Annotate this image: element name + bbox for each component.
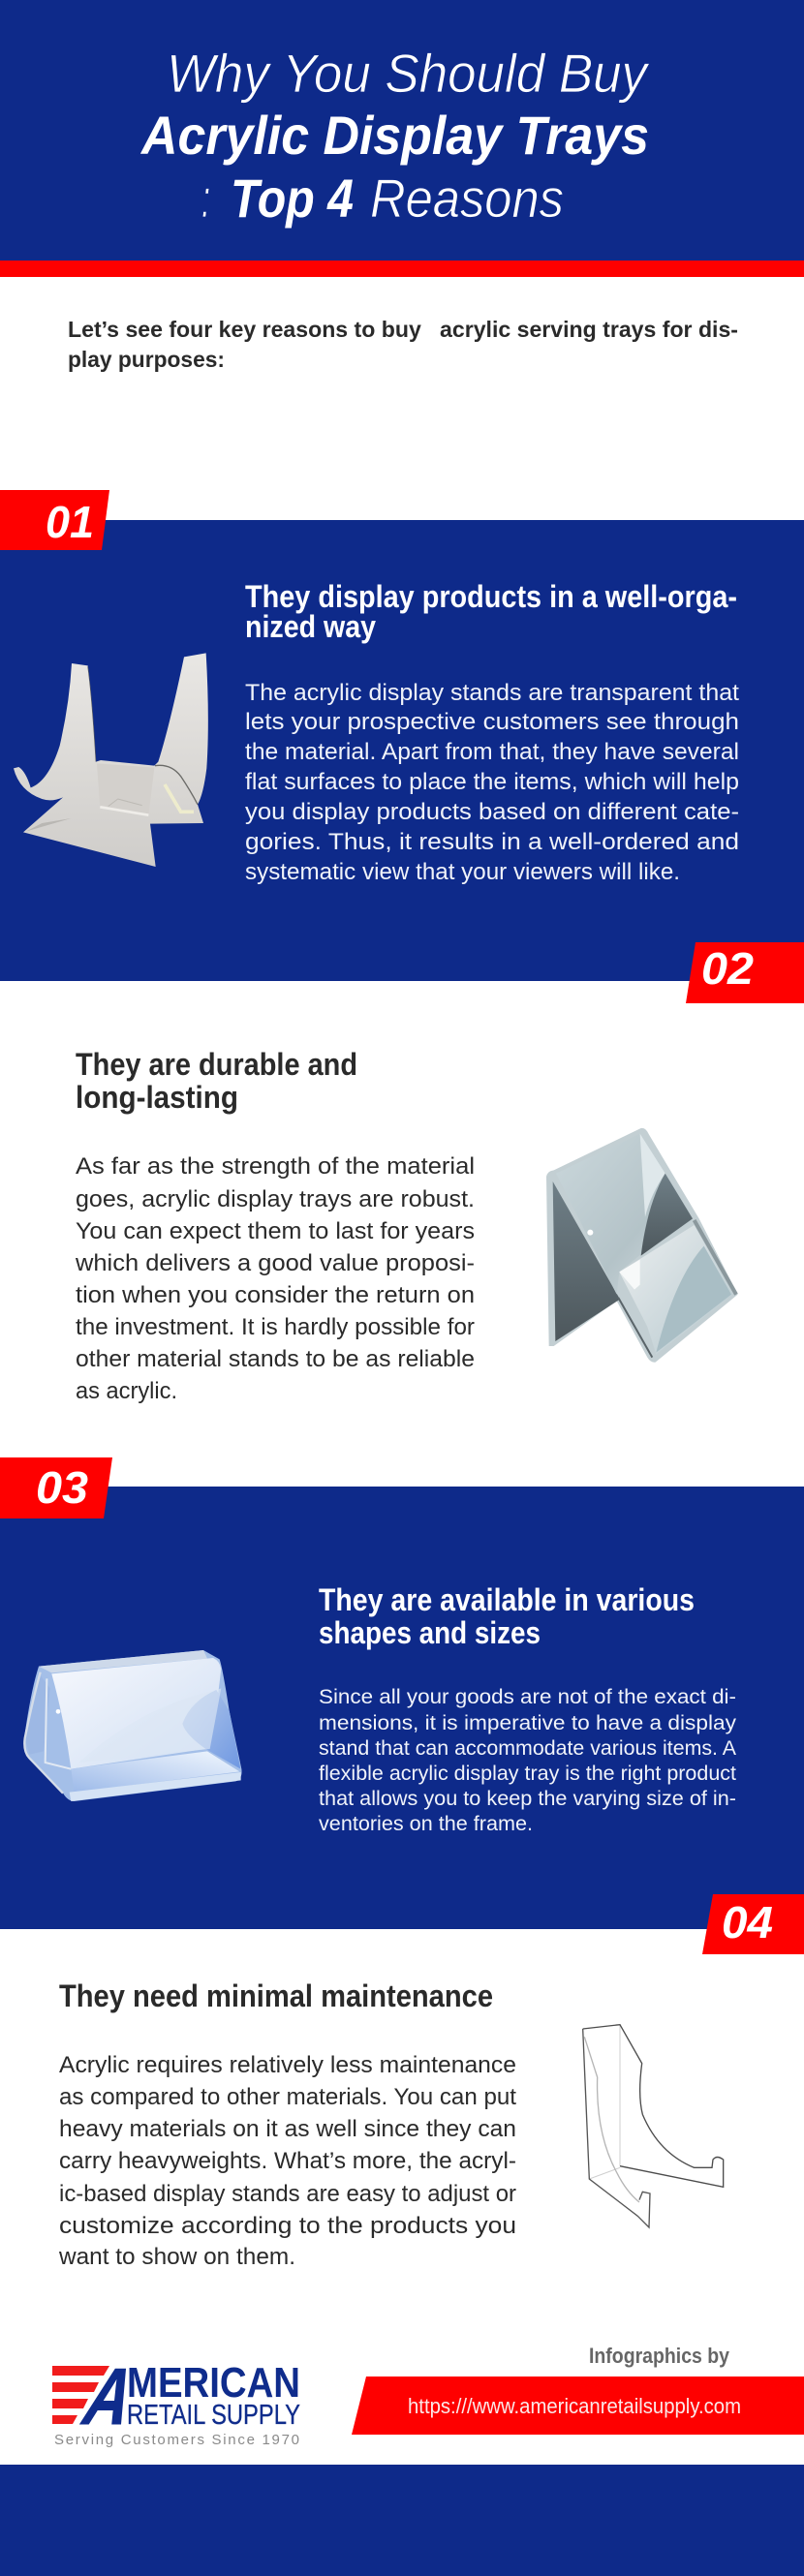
title: Why You Should Buy bbox=[167, 43, 650, 104]
number tag 04 bbox=[702, 1894, 804, 1954]
body text: reason 4: customize according to the products you bbox=[59, 2213, 516, 2239]
body text: reason 4: heavy materials on it as well since they can bbox=[59, 2116, 516, 2142]
body text: reason 3: flexible acrylic display tray is the right product bbox=[319, 1762, 736, 1785]
heading: reason 1: They display products in a well-orga- bbox=[245, 579, 737, 614]
body text: reason 4: carry heavyweights. What’s more, the acryl- bbox=[59, 2148, 516, 2174]
logo wordmark: RETAIL SUPPLY bbox=[127, 2400, 300, 2431]
number tag 03 bbox=[0, 1457, 112, 1518]
image: clear easel line drawing bbox=[583, 2025, 724, 2227]
body text: reason 3: that allows you to keep the varying size of in- bbox=[319, 1787, 736, 1810]
footer band bbox=[0, 2465, 804, 2576]
body text: reason 2: tion when you consider the return on bbox=[76, 1282, 475, 1308]
panel: header banner bbox=[0, 0, 804, 277]
logo: American Retail Supply bbox=[52, 2352, 300, 2448]
number tag 01: 01 bbox=[46, 497, 94, 547]
logo stripes bbox=[52, 2366, 109, 2424]
body text: reason 3: mensions, it is imperative to have a display bbox=[319, 1711, 736, 1734]
body text: reason 1: the material. Apart from that, they have several bbox=[245, 739, 739, 765]
title bbox=[139, 43, 650, 229]
body text: reason 3 bbox=[319, 1685, 737, 1835]
body text: reason 3: Since all your goods are not of the exact di- bbox=[319, 1685, 736, 1708]
body text: reason 4: as compared to other materials. You can put bbox=[59, 2084, 516, 2110]
intro text bbox=[68, 317, 738, 372]
body text: reason 2 bbox=[75, 1153, 475, 1404]
body text: reason 3: stand that can accommodate various items. A bbox=[319, 1736, 737, 1760]
number tag 01 bbox=[0, 490, 109, 550]
image: white acrylic easel stand bbox=[14, 653, 208, 867]
body text: reason 4: ic-based display stands are easy to adjust or bbox=[59, 2181, 516, 2207]
body text: reason 2: other material stands to be as reliable bbox=[76, 1346, 475, 1372]
panel: reason 1 bbox=[0, 490, 804, 981]
body text: reason 1: lets your prospective customers see through bbox=[245, 709, 739, 735]
body text: reason 2: as acrylic. bbox=[76, 1378, 177, 1404]
body text: reason 1: The acrylic display stands are transparent that bbox=[245, 680, 739, 706]
logo tagline: Serving Customers Since 1970 bbox=[54, 2432, 299, 2448]
title: : bbox=[201, 168, 210, 229]
title: Top 4 bbox=[231, 168, 354, 229]
body text: reason 2: You can expect them to last for years bbox=[76, 1218, 475, 1244]
heading: reason 1 bbox=[245, 579, 737, 644]
title: Reasons bbox=[370, 168, 564, 229]
heading: reason 1: nized way bbox=[245, 609, 376, 644]
body text: reason 1 bbox=[245, 680, 739, 885]
number tag 04: 04 bbox=[722, 1897, 773, 1947]
heading: reason 4: They need minimal maintenance bbox=[59, 1978, 493, 2013]
url banner bbox=[352, 2377, 804, 2435]
body text: reason 1: you display products based on different cate- bbox=[245, 799, 739, 825]
body text: reason 2: the investment. It is hardly possible for bbox=[76, 1314, 475, 1340]
image: clear tent-shaped display holder bbox=[24, 1650, 242, 1801]
panel: reason 3 bbox=[0, 1457, 804, 1929]
body text: reason 4: want to show on them. bbox=[58, 2244, 295, 2270]
heading: reason 2: long-lasting bbox=[76, 1080, 238, 1115]
intro text: Let’s see four key reasons to buy acrylic serving trays for dis- bbox=[68, 317, 738, 342]
url banner: https:///www.americanretailsupply.com bbox=[408, 2394, 741, 2418]
body text: reason 1: systematic view that your viewers will like. bbox=[245, 859, 680, 885]
title: Acrylic Display Trays bbox=[139, 105, 649, 166]
panel: reason 4 bbox=[0, 1894, 804, 2336]
body text: reason 3: ventories on the frame. bbox=[319, 1812, 533, 1835]
heading: reason 3 bbox=[319, 1582, 695, 1650]
body text: reason 1: flat surfaces to place the items, which will help bbox=[245, 769, 739, 795]
heading: reason 2 bbox=[76, 1047, 357, 1115]
heading: reason 3: shapes and sizes bbox=[319, 1615, 541, 1650]
intro text: play purposes: bbox=[68, 347, 225, 372]
logo wordmark: A bbox=[72, 2352, 148, 2441]
body text: reason 4 bbox=[58, 2052, 516, 2270]
credit label: Infographics by bbox=[589, 2344, 730, 2368]
logo wordmark: MERICAN bbox=[127, 2359, 300, 2407]
heading: reason 2: They are durable and bbox=[76, 1047, 357, 1082]
panel: reason 2 bbox=[0, 942, 804, 1487]
body text: reason 1: gories. Thus, it results in a well-ordered and bbox=[245, 829, 739, 855]
image: glass A-frame display stand bbox=[546, 1128, 738, 1363]
number tag 02: 02 bbox=[701, 943, 754, 994]
number tag 02 bbox=[686, 942, 804, 1003]
number tag 03: 03 bbox=[36, 1462, 88, 1513]
heading: reason 3: They are available in various bbox=[319, 1582, 695, 1617]
body text: reason 2: goes, acrylic display trays are robust. bbox=[76, 1186, 475, 1212]
logo wordmark bbox=[72, 2352, 300, 2441]
body text: reason 4: Acrylic requires relatively less maintenance bbox=[59, 2052, 516, 2078]
body text: reason 2: As far as the strength of the material bbox=[76, 1153, 475, 1180]
body text: reason 2: which delivers a good value proposi- bbox=[75, 1250, 475, 1276]
